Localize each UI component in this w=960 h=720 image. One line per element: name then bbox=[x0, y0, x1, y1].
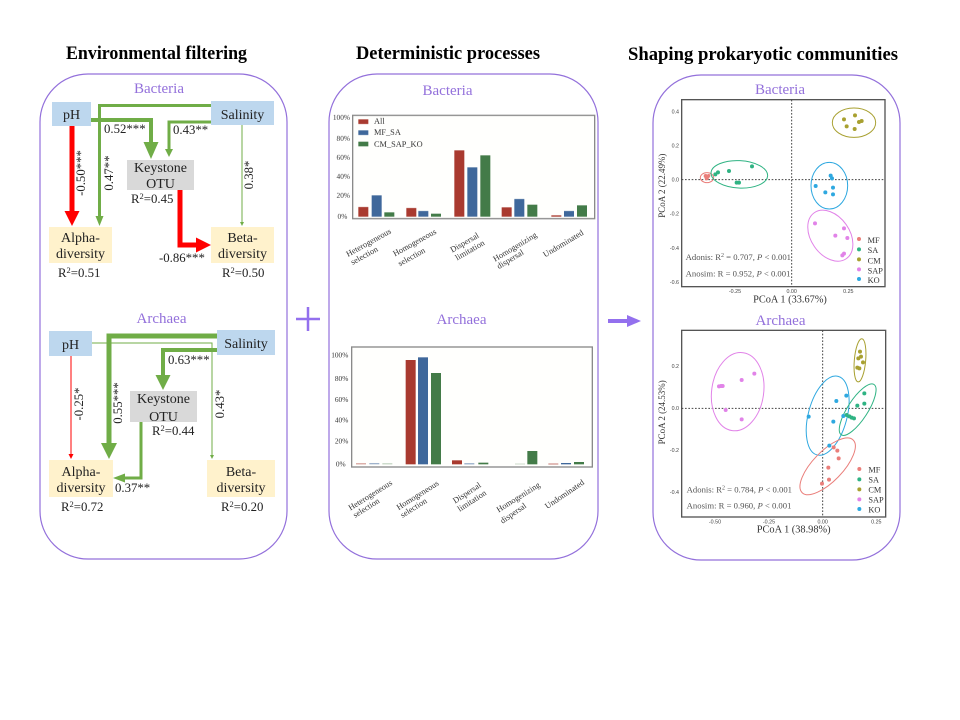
plot frame bbox=[682, 330, 886, 517]
plot frame bbox=[682, 100, 885, 287]
statistics bbox=[687, 485, 792, 511]
arrow: keystone to alpha bbox=[113, 422, 141, 482]
statistics: = 0.707, bbox=[724, 252, 757, 262]
R-squared labels: =0.72 bbox=[74, 500, 103, 514]
axis titles: PCoA 1 (38.98%) bbox=[757, 524, 831, 535]
box: Beta-diversity bbox=[211, 227, 274, 263]
box: Keystone OTU bbox=[127, 160, 194, 192]
box: Alpha-diversity bbox=[49, 227, 112, 263]
R-squared labels: R bbox=[131, 192, 140, 206]
R-squared labels: 2 bbox=[161, 423, 165, 433]
legend: CM bbox=[868, 256, 881, 265]
axis ticks: -0.25 bbox=[763, 520, 775, 526]
axis ticks: 0.25 bbox=[843, 289, 854, 295]
box: Alpha-diversity: Alpha- bbox=[62, 465, 101, 480]
category labels: selection bbox=[399, 496, 429, 520]
y axis ticks: 20% bbox=[337, 191, 350, 200]
statistics: Adonis: R bbox=[687, 485, 722, 495]
R-squared labels: R bbox=[222, 266, 231, 280]
arrow: pH to keystone bbox=[91, 120, 158, 159]
category labels: Heterogeneous bbox=[345, 227, 393, 259]
axis ticks bbox=[670, 109, 854, 295]
sample points bbox=[717, 350, 866, 486]
coefficient labels: 0.43* bbox=[213, 390, 227, 418]
statistics bbox=[686, 252, 791, 279]
statistics: Anosim: R = 0.952, P < 0.001 bbox=[686, 269, 790, 279]
category labels: limitation bbox=[454, 238, 487, 262]
y axis ticks: 60% bbox=[335, 395, 348, 404]
box: Alpha-diversity: diversity bbox=[56, 247, 105, 262]
heading: Bacteria: Bacteria bbox=[755, 82, 805, 98]
zero lines bbox=[682, 330, 886, 517]
coefficient labels: 0.37** bbox=[115, 481, 150, 495]
y axis ticks: 40% bbox=[337, 172, 350, 181]
R-squared labels bbox=[61, 423, 263, 514]
statistics: = 0.784, bbox=[725, 485, 758, 495]
coefficient labels: -0.50*** bbox=[74, 150, 88, 196]
R-squared labels: 2 bbox=[230, 499, 234, 509]
legend: SAP bbox=[868, 496, 884, 505]
axis ticks: 0.25 bbox=[871, 520, 882, 526]
axis ticks: -0.6 bbox=[670, 280, 679, 286]
statistics: 2 bbox=[721, 253, 724, 259]
legend: SA bbox=[868, 246, 878, 255]
box: pH bbox=[52, 102, 91, 126]
box: Salinity: Salinity bbox=[221, 108, 264, 123]
title: Deterministic processes: Deterministic processes bbox=[356, 44, 540, 64]
arrow: salinity to alpha bbox=[101, 336, 217, 459]
y axis ticks bbox=[333, 113, 350, 221]
box: Keystone OTU: OTU bbox=[146, 177, 175, 192]
y axis ticks: 0% bbox=[338, 212, 347, 221]
statistics: P < 0.001 bbox=[758, 485, 792, 495]
legend: MF bbox=[868, 236, 880, 245]
R-squared labels: R bbox=[221, 500, 230, 514]
arrow: salinity to alpha bbox=[96, 106, 211, 226]
category labels: Undominated bbox=[542, 228, 586, 259]
category labels: Homogeneous bbox=[395, 479, 440, 512]
arrow: salinity to keystone bbox=[165, 122, 211, 157]
panel: deterministic processes bbox=[329, 74, 598, 559]
box: Keystone OTU bbox=[130, 391, 197, 425]
coefficient labels: 0.43** bbox=[173, 123, 208, 137]
y axis ticks: 100% bbox=[331, 350, 348, 359]
R-squared labels: 2 bbox=[67, 265, 71, 275]
axis titles: PCoA 2 (24.53%) bbox=[657, 380, 667, 444]
axis ticks: -0.2 bbox=[670, 212, 679, 218]
statistics: 2 bbox=[722, 486, 725, 492]
y axis ticks: 40% bbox=[335, 416, 348, 425]
axis ticks: 0.0 bbox=[672, 177, 679, 183]
group ellipses bbox=[700, 108, 876, 270]
axis ticks: 0.00 bbox=[786, 289, 797, 295]
category labels: Homogeneous bbox=[391, 227, 438, 258]
icon: plus sign bbox=[296, 307, 320, 331]
bar chart: archaea bbox=[331, 347, 592, 526]
category labels: Dispersal bbox=[451, 480, 483, 505]
category labels bbox=[347, 477, 587, 526]
axis ticks: -0.4 bbox=[670, 246, 679, 252]
y axis ticks: 0% bbox=[336, 460, 346, 469]
axis titles bbox=[657, 380, 831, 535]
box: pH bbox=[49, 331, 92, 356]
R-squared labels: 2 bbox=[231, 265, 235, 275]
axis ticks: 0.0 bbox=[672, 406, 679, 412]
category labels: dispersal bbox=[495, 247, 526, 271]
category labels bbox=[345, 227, 586, 271]
R-squared labels: 2 bbox=[140, 191, 144, 201]
legend: KO bbox=[868, 276, 880, 285]
coefficient labels bbox=[74, 122, 256, 265]
plot frame bbox=[352, 347, 592, 467]
axis ticks bbox=[670, 364, 882, 526]
R-squared labels: R bbox=[152, 424, 161, 438]
category labels: Homogenizing bbox=[495, 480, 542, 514]
box: Beta-diversity: Beta- bbox=[226, 465, 256, 480]
legend: SAP bbox=[868, 266, 883, 275]
path diagram: bacteria bbox=[49, 101, 274, 280]
category labels: selection bbox=[351, 496, 382, 520]
coefficient labels: 0.52*** bbox=[104, 122, 146, 136]
group ellipses bbox=[706, 338, 882, 503]
box: Alpha-diversity: diversity bbox=[56, 481, 106, 496]
statistics: P < 0.001 bbox=[757, 252, 791, 262]
y axis ticks: 100% bbox=[333, 113, 350, 122]
legend: CM bbox=[868, 486, 882, 495]
R-squared labels: =0.45 bbox=[144, 192, 173, 206]
category labels: Homogenizing bbox=[491, 230, 539, 264]
R-squared labels: =0.50 bbox=[235, 266, 264, 280]
zero lines bbox=[682, 100, 885, 287]
axis ticks: 0.00 bbox=[817, 520, 828, 526]
title: Shaping prokaryotic communities: Shaping prokaryotic communities bbox=[628, 45, 898, 65]
category labels: selection bbox=[349, 244, 380, 267]
axis ticks: 0.2 bbox=[672, 364, 679, 370]
axis ticks: 0.4 bbox=[672, 109, 679, 115]
panel outline bbox=[329, 74, 598, 559]
y axis ticks: 20% bbox=[335, 437, 348, 446]
R-squared labels: =0.51 bbox=[71, 266, 100, 280]
category labels: dispersal bbox=[499, 501, 529, 526]
bars bbox=[358, 150, 587, 217]
y axis ticks bbox=[331, 350, 348, 469]
arrow: salinity to beta bbox=[240, 125, 244, 226]
y axis ticks: 60% bbox=[337, 153, 350, 162]
R-squared labels: 2 bbox=[70, 499, 74, 509]
box: Beta-diversity: Beta- bbox=[227, 231, 258, 246]
box: Keystone OTU: OTU bbox=[149, 410, 178, 425]
axis ticks: -0.50 bbox=[709, 520, 721, 526]
coefficient labels: 0.63*** bbox=[168, 353, 210, 367]
axis ticks: -0.4 bbox=[670, 490, 679, 496]
box: Alpha-diversity bbox=[49, 460, 113, 497]
panel outline bbox=[653, 75, 900, 560]
arrow: keystone to beta bbox=[180, 190, 211, 252]
box: Keystone OTU: Keystone bbox=[137, 392, 190, 407]
bar chart: bacteria bbox=[333, 113, 595, 271]
heading: Bacteria: Bacteria bbox=[423, 83, 473, 99]
coefficient labels: -0.25* bbox=[72, 387, 86, 421]
legend: CM_SAP_KO bbox=[374, 140, 423, 149]
box: pH: pH bbox=[63, 108, 80, 123]
R-squared labels bbox=[58, 191, 264, 280]
box: Salinity: Salinity bbox=[224, 337, 268, 352]
y axis ticks: 80% bbox=[335, 374, 348, 383]
path diagram: archaea bbox=[49, 330, 275, 514]
R-squared labels: R bbox=[58, 266, 67, 280]
box: Beta-diversity: diversity bbox=[216, 481, 266, 496]
category labels: Undominated bbox=[543, 477, 587, 511]
arrow: salinity to keystone bbox=[156, 350, 217, 390]
category labels: selection bbox=[397, 245, 428, 268]
coefficient labels: 0.55*** bbox=[111, 382, 125, 424]
R-squared labels: =0.20 bbox=[234, 500, 263, 514]
legend bbox=[857, 465, 884, 514]
category labels: limitation bbox=[456, 488, 489, 514]
axis ticks: 0.2 bbox=[672, 143, 679, 149]
coefficient labels bbox=[72, 353, 227, 495]
box: pH: pH bbox=[62, 338, 79, 353]
title: Environmental filtering: Environmental filtering bbox=[66, 44, 248, 64]
heading: Bacteria: Bacteria bbox=[134, 81, 184, 97]
plot frame bbox=[353, 115, 595, 219]
panel: shaping prokaryotic communities bbox=[653, 75, 900, 560]
box: Salinity bbox=[211, 101, 274, 125]
sample points bbox=[704, 113, 864, 257]
category labels: Heterogeneous bbox=[347, 478, 394, 512]
statistics: Anosim: R = 0.960, P < 0.001 bbox=[687, 501, 791, 511]
heading: Archaea: Archaea bbox=[137, 311, 187, 327]
coefficient labels: -0.86*** bbox=[159, 251, 205, 265]
axis titles: PCoA 2 (22.49%) bbox=[657, 154, 667, 218]
arrow: to shaping panel bbox=[608, 315, 641, 327]
box: Keystone OTU: Keystone bbox=[134, 161, 187, 176]
statistics: Adonis: R bbox=[686, 252, 721, 262]
arrow: pH to beta bbox=[92, 343, 214, 459]
coefficient labels: 0.47** bbox=[102, 155, 116, 191]
R-squared labels: R bbox=[61, 500, 70, 514]
legend bbox=[358, 117, 423, 149]
heading: Archaea: Archaea bbox=[756, 313, 806, 329]
panel: environmental filtering bbox=[40, 74, 287, 559]
scatter plot: archaea PCoA bbox=[657, 330, 886, 535]
axis ticks: -0.25 bbox=[729, 289, 741, 295]
legend: MF bbox=[868, 465, 881, 474]
box: Beta-diversity bbox=[207, 460, 275, 497]
arrow: pH to alpha bbox=[68, 356, 74, 459]
axis titles bbox=[657, 154, 827, 305]
legend: All bbox=[374, 117, 385, 126]
arrow: pH to alpha bbox=[64, 126, 80, 226]
heading: Archaea: Archaea bbox=[437, 312, 487, 328]
scatter plot: bacteria PCoA bbox=[657, 100, 885, 305]
bars bbox=[356, 357, 584, 464]
y axis ticks: 80% bbox=[337, 134, 350, 143]
box: Beta-diversity: diversity bbox=[218, 247, 267, 262]
category labels: Dispersal bbox=[449, 231, 481, 254]
box: Salinity bbox=[217, 330, 275, 355]
R-squared labels: =0.44 bbox=[165, 424, 195, 438]
legend bbox=[857, 236, 883, 285]
axis titles: PCoA 1 (33.67%) bbox=[753, 294, 827, 305]
legend: KO bbox=[868, 505, 880, 514]
legend: MF_SA bbox=[374, 128, 401, 137]
box: Alpha-diversity: Alpha- bbox=[61, 231, 100, 246]
axis ticks: -0.2 bbox=[670, 448, 679, 454]
panel outline bbox=[40, 74, 287, 559]
legend: SA bbox=[868, 476, 879, 485]
coefficient labels: 0.38* bbox=[242, 161, 256, 189]
